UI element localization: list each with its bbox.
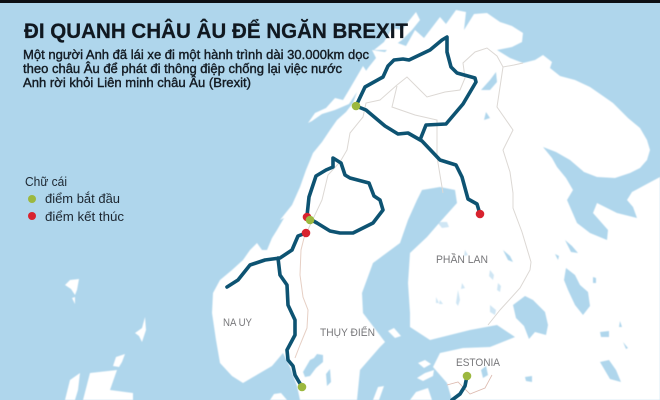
route: southern Norway [227,233,306,387]
route: northern loop [356,37,480,214]
land: Scotland [65,370,133,400]
land: Denmark [270,393,287,400]
label: Norway: NA UY [223,317,253,329]
country borders [295,48,531,358]
legend: start point: điểm bắt đầu [45,191,120,206]
lake: Vanern [303,354,323,377]
land: Aland islands [388,328,401,338]
routes [227,37,480,400]
legend [25,174,124,224]
marker: end points [302,210,484,237]
lake: Onega [564,268,590,315]
land: northern islands [374,12,420,50]
land: Latvia peninsula [410,388,432,400]
label: Finland: PHẦN LAN [436,253,488,266]
label: Estonia: ESTONIA [456,357,501,369]
label: Sweden: THỤY ĐIỂN [320,326,375,339]
land: Lofoten islands [308,66,367,123]
land: Faroe Islands [65,279,79,304]
marker: start points [298,102,471,391]
lake: Inari [481,72,497,90]
lake: Estonia Peipus [481,366,488,378]
route: Baltic [452,376,467,400]
subtitle: theo châu Âu để phát đi thông điệp chống lại việc nước [23,61,342,76]
land: Orkney [113,354,125,367]
title: ĐI QUANH CHÂU ÂU ĐỂ NGĂN BREXIT [24,19,408,43]
subtitle: Một người Anh đã lái xe đi một hành trình dài 30.000km dọc [23,47,369,62]
subtitle: Anh rời khỏi Liên minh châu Âu (Brexit) [23,75,251,90]
lakes: small Russia [484,112,628,382]
lakes [303,72,628,386]
land: Estonian islands [417,360,434,381]
lake: Vattern area [326,369,331,386]
country labels [223,253,501,369]
land: Scandinavia, Finland and Russia [212,10,660,400]
legend: end point: điểm kết thúc [45,209,124,224]
border: Baltic states [447,375,492,394]
land: Gotland area [373,386,384,400]
route: central loop [307,158,383,233]
land: Shetland [135,317,146,342]
subtitle [23,47,369,90]
top bar [0,0,660,3]
legend heading: Chữ cái [25,174,67,189]
lake: Ladoga [513,296,548,339]
lakes: small Finland [436,222,501,315]
